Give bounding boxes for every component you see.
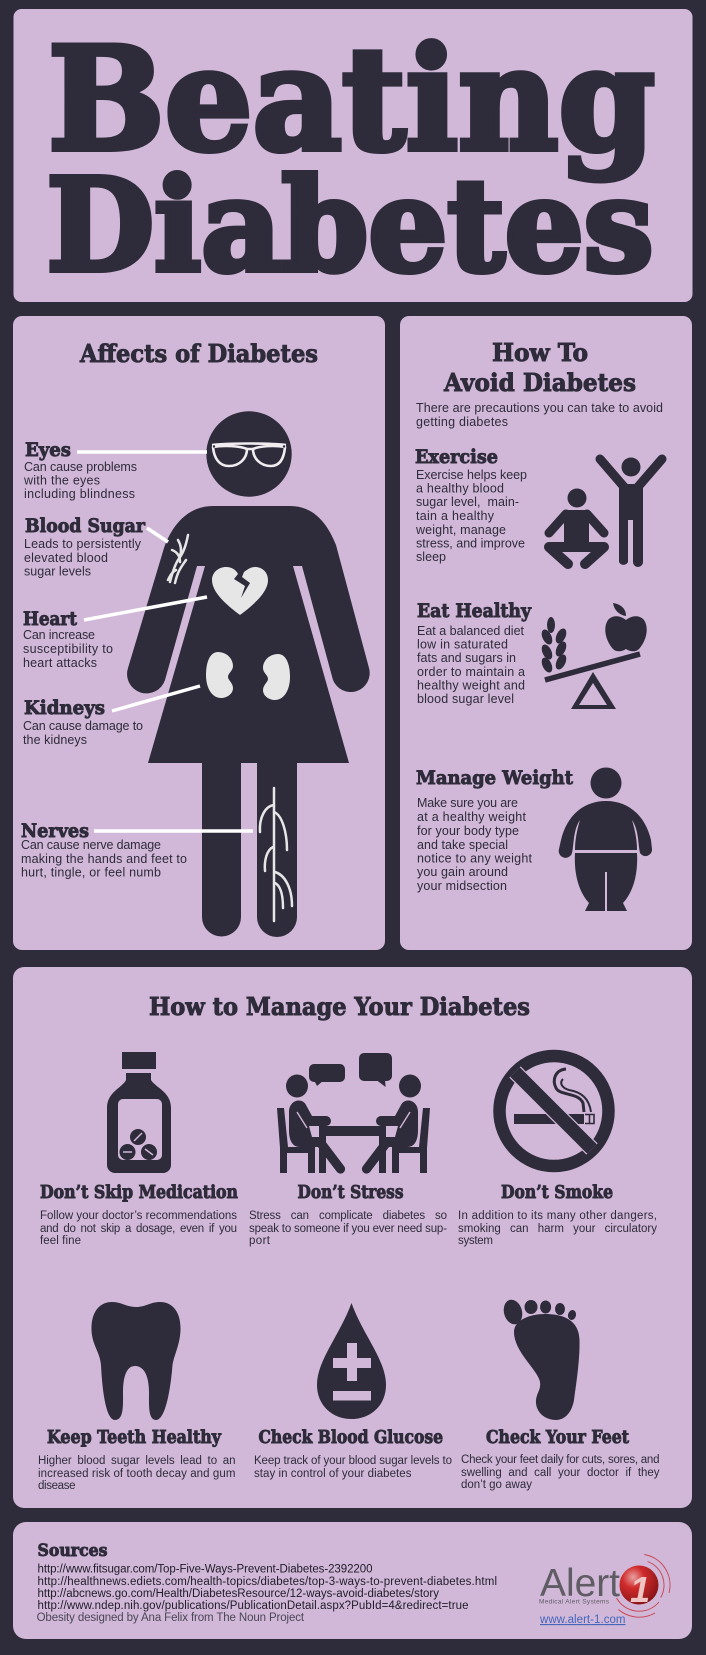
label: nerves: Can cause nerve damage: [21, 838, 161, 852]
intro text: There are precautions you can take to avoid: [416, 401, 663, 415]
icon: tooth: [91, 1302, 181, 1420]
block: manage weight: your midsection: [417, 879, 507, 893]
block: check your feet: swelling and call your doctor if they: [461, 1467, 660, 1479]
label: eyes: [23, 439, 207, 501]
label: nerves: Nerves: [21, 820, 89, 842]
heading: how to avoid diabetes: [443, 338, 636, 397]
source links: http://www.fitsugar.com/Top-Five-Ways-Prevent-Diabetes-2392200: [38, 1564, 372, 1576]
block: don't skip medication: Follow your doctor’s recommendations: [40, 1210, 237, 1222]
icon: nerves: [260, 788, 292, 921]
block: manage weight: you gain around: [417, 865, 508, 879]
block: manage weight: [416, 767, 573, 893]
block: eat healthy: [417, 600, 532, 706]
panel: affects of diabetes: [13, 316, 385, 950]
icon: blood vessel: [168, 535, 188, 583]
block: check your feet: Check Your Feet: [486, 1428, 629, 1448]
block: exercise: [415, 446, 527, 564]
block: exercise: weight, manage: [415, 523, 506, 537]
block: don't skip medication: [40, 1183, 238, 1247]
logo: Alert-1: 1: [630, 1569, 650, 1610]
block: keep teeth healthy: [38, 1428, 236, 1492]
label: kidneys: the kidneys: [23, 733, 87, 747]
block: exercise: Exercise: [415, 446, 498, 468]
block: keep teeth healthy: Keep Teeth Healthy: [47, 1428, 222, 1448]
icon: overweight person: [559, 768, 652, 911]
block: manage weight: for your body type: [417, 824, 519, 838]
block: exercise: stress, and improve: [416, 536, 525, 550]
block: don't stress: Don’t Stress: [298, 1183, 404, 1203]
label: eyes: including blindness: [24, 487, 135, 501]
heading: affects of diabetes: Affects of Diabetes: [79, 339, 318, 368]
source links: http://www.ndep.nih.gov/publications/PublicationDetail.aspx?PubId=4&redirect=true: [38, 1600, 468, 1612]
block: don't stress: speak to someone if you ever need sup-: [249, 1223, 447, 1235]
label: kidneys: Kidneys: [24, 697, 105, 719]
panel: how to manage your diabetes: [13, 967, 692, 1508]
block: exercise: Exercise helps keep: [416, 468, 527, 482]
label: heart: [23, 597, 207, 670]
label: kidneys: [23, 686, 200, 747]
label: eyes: Eyes: [25, 439, 71, 461]
block: check blood glucose: Keep track of your blood sugar levels to: [254, 1455, 452, 1467]
label: nerves: hurt, tingle, or feel numb: [21, 866, 161, 880]
label: blood sugar: sugar levels: [24, 564, 91, 578]
block: don't stress: [249, 1183, 447, 1247]
heading: sources: Sources: [38, 1541, 108, 1561]
block: don't smoke: smoking can harm your circulatory: [458, 1223, 657, 1235]
source links: http://abcnews.go.com/Health/DiabetesResource/12-ways-avoid-diabetes/story: [38, 1588, 439, 1600]
block: eat healthy: Eat Healthy: [417, 600, 532, 622]
logo: Alert-1: Medical Alert Systems: [539, 1598, 610, 1606]
panel: title: [14, 9, 692, 302]
title: Beating Diabetes: [46, 17, 655, 300]
icon: broken heart: [212, 567, 268, 615]
block: eat healthy: Eat a balanced diet: [417, 624, 525, 638]
intro text: [416, 401, 663, 429]
block: manage weight: and take special: [417, 838, 508, 852]
label: heart: heart attacks: [23, 656, 97, 670]
logo: Alert-1: [539, 1554, 670, 1626]
icon: medicine bottle: [107, 1052, 171, 1173]
block: check your feet: [461, 1428, 660, 1491]
label: blood sugar: Blood Sugar: [25, 515, 146, 537]
source links: Obesity designed by Ana Felix from The Noun Project: [37, 1612, 305, 1624]
icon: foot: [501, 1298, 580, 1420]
source links: [37, 1564, 497, 1624]
block: keep teeth healthy: Higher blood sugar levels lead to an: [38, 1455, 236, 1467]
icon: scale with wheat and apple: [540, 603, 647, 709]
block: manage weight: at a healthy weight: [417, 810, 527, 824]
block: don't smoke: [458, 1183, 657, 1247]
label: nerves: making the hands and feet to: [21, 852, 187, 866]
label: heart: Can increase: [23, 628, 95, 642]
block: don't skip medication: and do not skip a dosage, even if you: [40, 1223, 237, 1235]
label: blood sugar: Leads to persistently: [24, 537, 142, 551]
block: check blood glucose: Check Blood Glucose: [258, 1428, 443, 1448]
block: don't skip medication: Don’t Skip Medication: [40, 1183, 238, 1203]
label: blood sugar: elevated blood: [24, 551, 108, 565]
block: manage weight: Manage Weight: [416, 767, 573, 789]
block: eat healthy: fats and sugars in: [417, 651, 516, 665]
block: exercise: sugar level, main-: [416, 495, 519, 509]
block: check blood glucose: [254, 1428, 452, 1480]
icon: kidneys: [206, 652, 290, 700]
block: don't skip medication: feel fine: [40, 1235, 81, 1247]
label: heart: Heart: [23, 608, 77, 630]
intro text: getting diabetes: [416, 415, 508, 429]
block: exercise: a healthy blood: [416, 482, 504, 496]
block: don't smoke: In addition to its many other dangers,: [458, 1210, 657, 1222]
logo: Alert-1: Alert: [540, 1562, 620, 1605]
block: eat healthy: healthy weight and: [417, 678, 525, 692]
label: eyes: with the eyes: [23, 474, 100, 488]
source links: http://healthnews.ediets.com/health-topics/diabetes/top-3-ways-to-prevent-diabetes.html: [38, 1576, 497, 1588]
icon: no smoking: [500, 1056, 608, 1166]
heading: how to avoid diabetes: How To: [492, 338, 588, 367]
heading: how to avoid diabetes: Avoid Diabetes: [443, 368, 636, 397]
icon: blood drop with plus and minus: [317, 1303, 386, 1419]
block: manage weight: notice to any weight: [417, 852, 533, 866]
title: Beating Diabetes: Diabetes: [46, 151, 654, 300]
icon: two people talking at table: [277, 1053, 430, 1174]
logo: Alert-1: www.alert-1.com: [539, 1614, 626, 1626]
block: eat healthy: low in saturated: [417, 638, 508, 652]
icon: glasses: [212, 444, 286, 466]
label: heart: susceptibility to: [23, 642, 113, 656]
label: blood sugar: [24, 515, 168, 578]
figure: woman silhouette: [127, 411, 370, 937]
heading: how to manage your diabetes: How to Manage Your Diabetes: [149, 992, 530, 1021]
title: Beating Diabetes: Beating: [48, 17, 655, 183]
panel: sources: [13, 1522, 692, 1639]
icon: exercising people: [549, 458, 662, 567]
panel: how to avoid diabetes: [400, 316, 692, 950]
block: eat healthy: order to maintain a: [417, 665, 525, 679]
block: don't stress: Stress can complicate diabetes so: [249, 1210, 447, 1222]
block: exercise: tain a healthy: [416, 509, 495, 523]
block: exercise: sleep: [416, 550, 446, 564]
label: nerves: [21, 820, 253, 880]
block: check your feet: Check your feet daily for cuts, sores, and: [461, 1454, 660, 1466]
block: check your feet: don’t go away: [461, 1479, 532, 1491]
block: don't smoke: system: [458, 1235, 493, 1247]
block: keep teeth healthy: increased risk of tooth decay and gum: [38, 1468, 236, 1480]
block: keep teeth healthy: disease: [38, 1480, 76, 1492]
label: kidneys: Can cause damage to: [23, 719, 143, 733]
block: don't stress: port: [249, 1235, 271, 1247]
block: don't smoke: Don’t Smoke: [501, 1183, 613, 1203]
block: eat healthy: blood sugar level: [417, 692, 514, 706]
block: manage weight: Make sure you are: [417, 796, 518, 810]
label: eyes: Can cause problems: [24, 460, 137, 474]
block: check blood glucose: stay in control of your diabetes: [254, 1468, 412, 1480]
